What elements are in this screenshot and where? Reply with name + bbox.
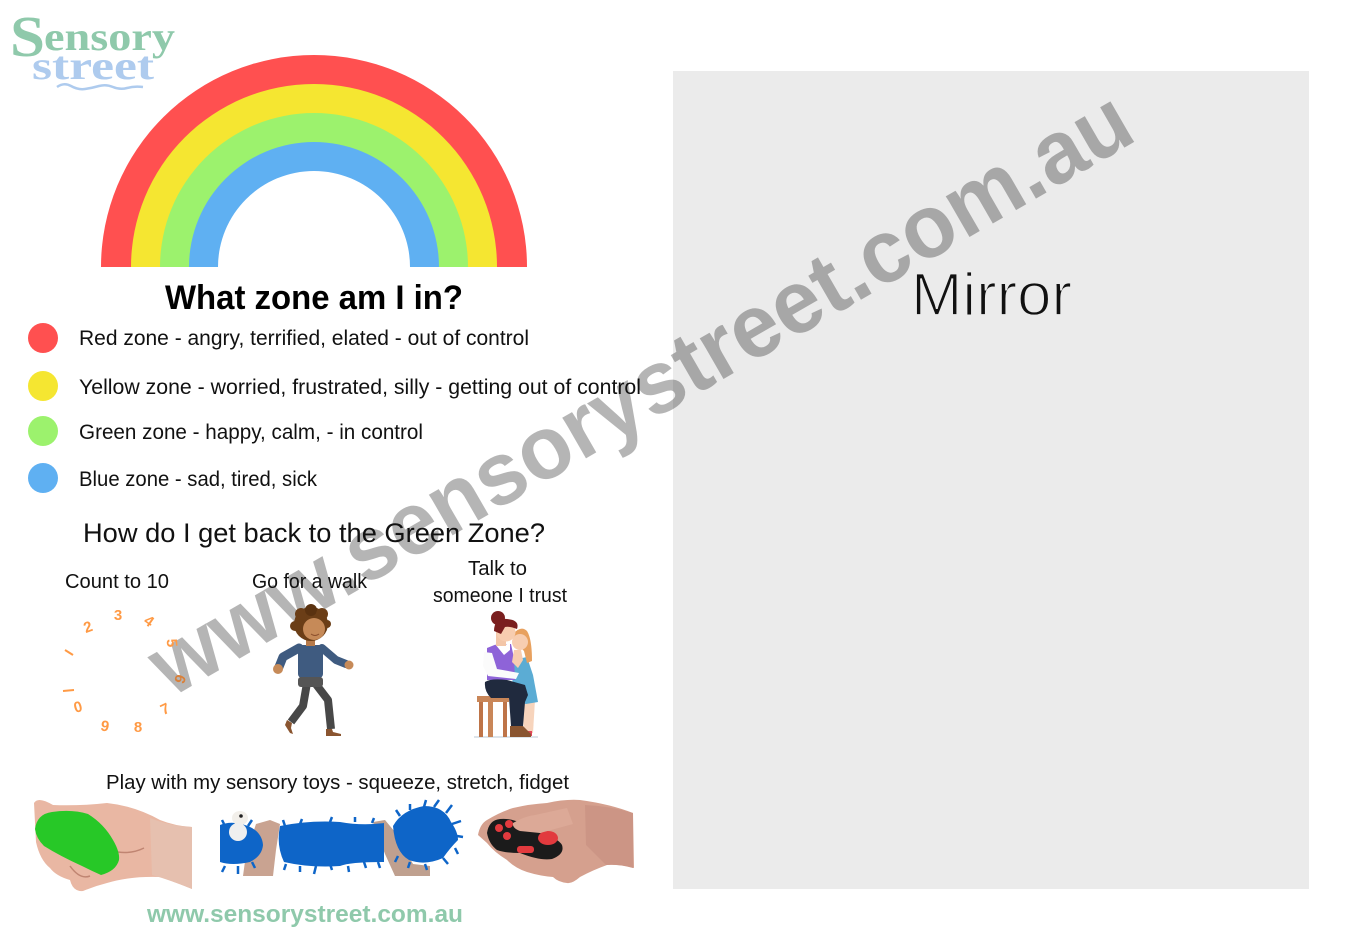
- icon: clock of numbers: 2: [81, 618, 95, 637]
- icon: walking boy: [273, 604, 354, 736]
- icon: clock of numbers: 4: [140, 612, 158, 631]
- icon: clock of numbers: 3: [114, 607, 122, 624]
- icon: clock of numbers: 8: [134, 719, 142, 736]
- label: Talk to someone I trust: [433, 558, 567, 607]
- rainbow: [101, 55, 527, 267]
- icon: clock of numbers: 0: [72, 698, 84, 717]
- icon: clock of numbers: 5: [163, 638, 180, 648]
- panel: mirror: [673, 71, 1309, 889]
- photo: hand squeezing green ball: [34, 800, 192, 891]
- label: Talk to someone I trust: someone I trust: [433, 585, 567, 607]
- red zone item: Red zone - angry, terrified, elated - out of control: [79, 327, 529, 350]
- footer url: www.sensorystreet.com.au: [146, 901, 463, 928]
- logo: Sensory Street: street: [32, 43, 155, 88]
- zone legend: [28, 323, 641, 493]
- green zone item: Green zone - happy, calm, - in control: [79, 421, 423, 444]
- red zone item: [28, 323, 529, 353]
- yellow zone item: [28, 371, 641, 401]
- text: Play with my sensory toys: Play with my sensory toys - squeeze, stretch, fidget: [106, 771, 569, 794]
- photo: hand holding fidget pad: [478, 800, 634, 883]
- label: Talk to someone I trust: Talk to: [468, 558, 527, 580]
- logo: Sensory Street: S: [10, 4, 45, 69]
- logo: Sensory Street: ensory: [44, 14, 175, 59]
- logo: Sensory Street: [10, 4, 175, 89]
- blue zone item: [28, 463, 317, 493]
- heading: What zone am I in?: What zone am I in?: [165, 279, 463, 317]
- icon: clock of numbers: 7: [158, 700, 173, 719]
- panel title: Mirror: Mirror: [911, 261, 1072, 328]
- label: Go for a walk: Go for a walk: [252, 571, 368, 593]
- subheading: How do I get back to the Green Zone?: How do I get back to the Green Zone?: [83, 518, 545, 548]
- blue zone item: Blue zone - sad, tired, sick: [79, 468, 317, 491]
- photo: blue spiky stretch toy: [220, 800, 463, 876]
- green zone item: [28, 416, 423, 446]
- label: Count to 10: Count to 10: [65, 571, 169, 593]
- icon: clock of numbers: 6: [170, 672, 189, 686]
- icon: woman hugging girl on stool: [474, 611, 538, 737]
- watermark url: www.sensorystreet.com.au: [130, 69, 1149, 715]
- yellow zone item: Yellow zone - worried, frustrated, silly - getting out of control: [79, 376, 641, 399]
- icon: clock of numbers: 9: [99, 717, 110, 736]
- icon: clock of numbers: [63, 607, 189, 736]
